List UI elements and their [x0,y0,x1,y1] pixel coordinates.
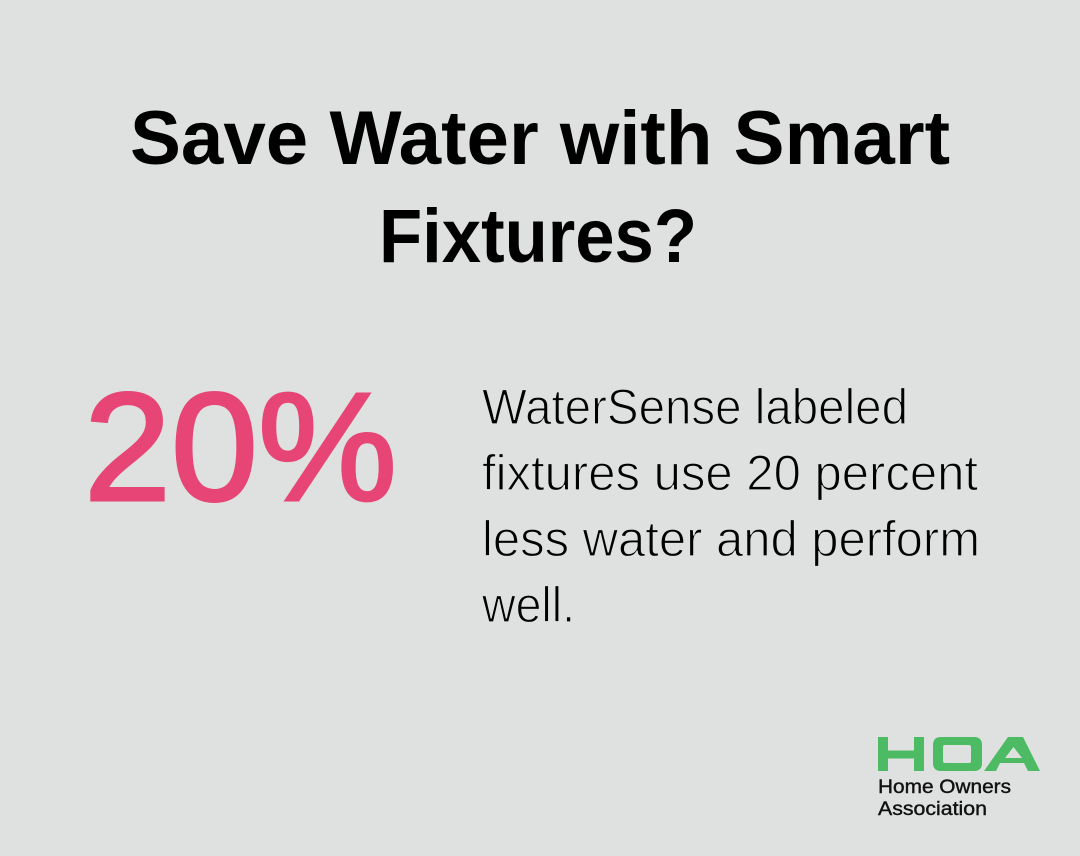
logo: Home Owners Association [878,737,1040,820]
description text: WaterSense labeled [482,379,908,435]
title [130,96,950,279]
logo mark: HOA letters [878,737,1040,771]
description text: fixtures use 20 percent [482,445,978,501]
description text: well. [481,577,575,633]
logo wordmark [878,777,1011,820]
logo wordmark: Home Owners [878,777,1011,798]
statistic: 20%: 20% [84,361,397,533]
title: Fixtures? [379,194,697,279]
logo wordmark: Association [878,799,987,820]
description text [481,379,980,633]
description text: less water and perform [482,511,980,567]
title: Save Water with Smart [130,96,950,181]
